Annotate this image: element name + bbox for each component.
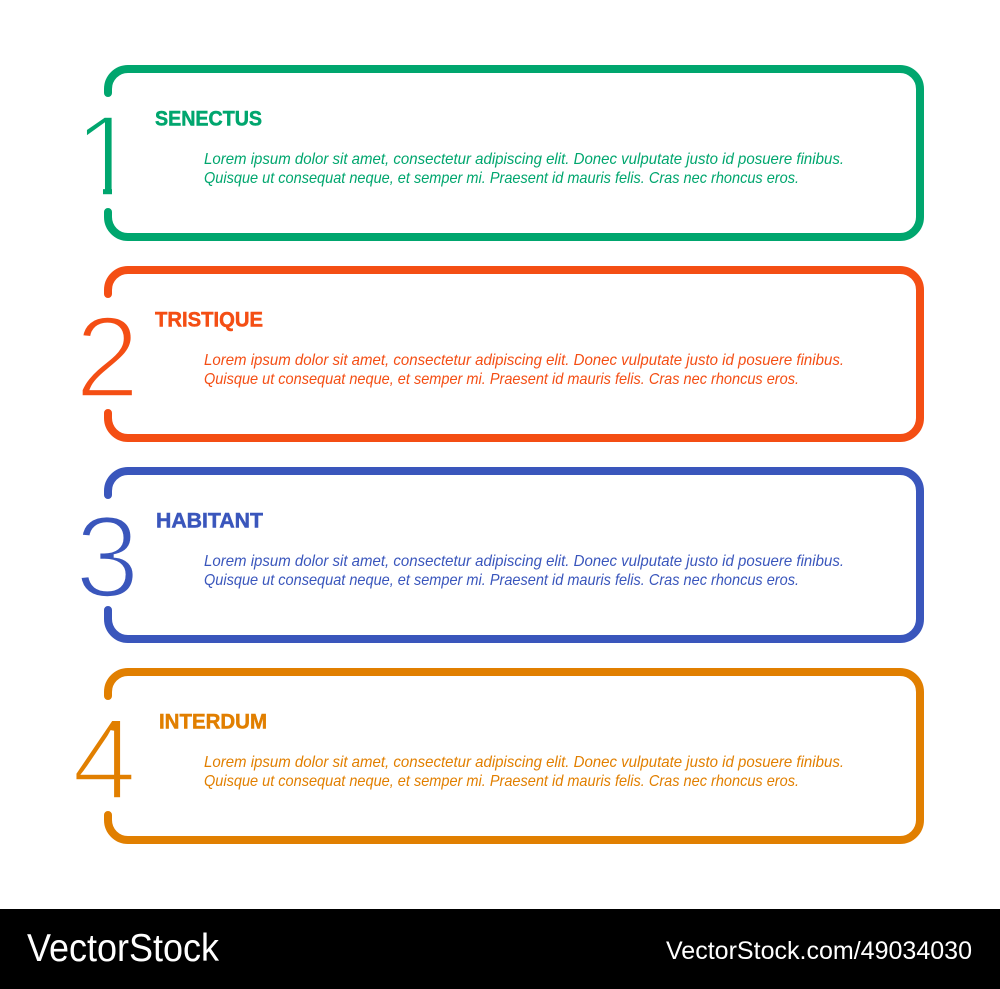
- body text 3: [204, 553, 844, 589]
- number 3: 3: [75, 492, 140, 622]
- body text 3: Lorem ipsum dolor sit amet, consectetur adipiscing elit. Donec vulputate justo id posuere finibus.: [204, 553, 844, 570]
- panel: step 1 senectus: [74, 69, 920, 237]
- footer logo: VectorStock: [27, 927, 219, 970]
- footer bar: [0, 909, 1000, 989]
- panel frame 2: [108, 270, 920, 438]
- number 4: 4: [72, 694, 137, 824]
- panel frame 3: [108, 471, 920, 639]
- footer url: VectorStock.com/49034030: [666, 937, 972, 965]
- body text 1: [204, 151, 844, 187]
- heading 2: TRISTIQUE: [155, 308, 263, 332]
- panel: step 3 habitant: [75, 471, 920, 639]
- panel frame 4: [108, 672, 920, 840]
- panel frame 1: [108, 69, 920, 237]
- body text 2: Quisque ut consequat neque, et semper mi. Praesent id mauris felis. Cras nec rhoncus eros.: [204, 371, 799, 388]
- body text 1: Lorem ipsum dolor sit amet, consectetur adipiscing elit. Donec vulputate justo id posuere finibus.: [204, 151, 844, 168]
- number 1: 1: [74, 91, 139, 221]
- panel: step 4 interdum: [72, 672, 920, 840]
- body text 4: Lorem ipsum dolor sit amet, consectetur adipiscing elit. Donec vulputate justo id posuere finibus.: [204, 754, 844, 771]
- body text 4: [204, 754, 844, 790]
- footer background: [0, 909, 1000, 989]
- body text 2: [204, 352, 844, 388]
- body text 4: Quisque ut consequat neque, et semper mi. Praesent id mauris felis. Cras nec rhoncus eros.: [204, 773, 799, 790]
- heading 3: HABITANT: [156, 510, 263, 532]
- body text 1: Quisque ut consequat neque, et semper mi. Praesent id mauris felis. Cras nec rhoncus eros.: [204, 170, 799, 187]
- heading 1: SENECTUS: [155, 108, 262, 130]
- number 2: 2: [75, 292, 140, 422]
- heading 4: INTERDUM: [159, 710, 267, 734]
- body text 3: Quisque ut consequat neque, et semper mi. Praesent id mauris felis. Cras nec rhoncus eros.: [204, 572, 799, 589]
- body text 2: Lorem ipsum dolor sit amet, consectetur adipiscing elit. Donec vulputate justo id posuere finibus.: [204, 352, 844, 369]
- panel: step 2 tristique: [75, 270, 920, 438]
